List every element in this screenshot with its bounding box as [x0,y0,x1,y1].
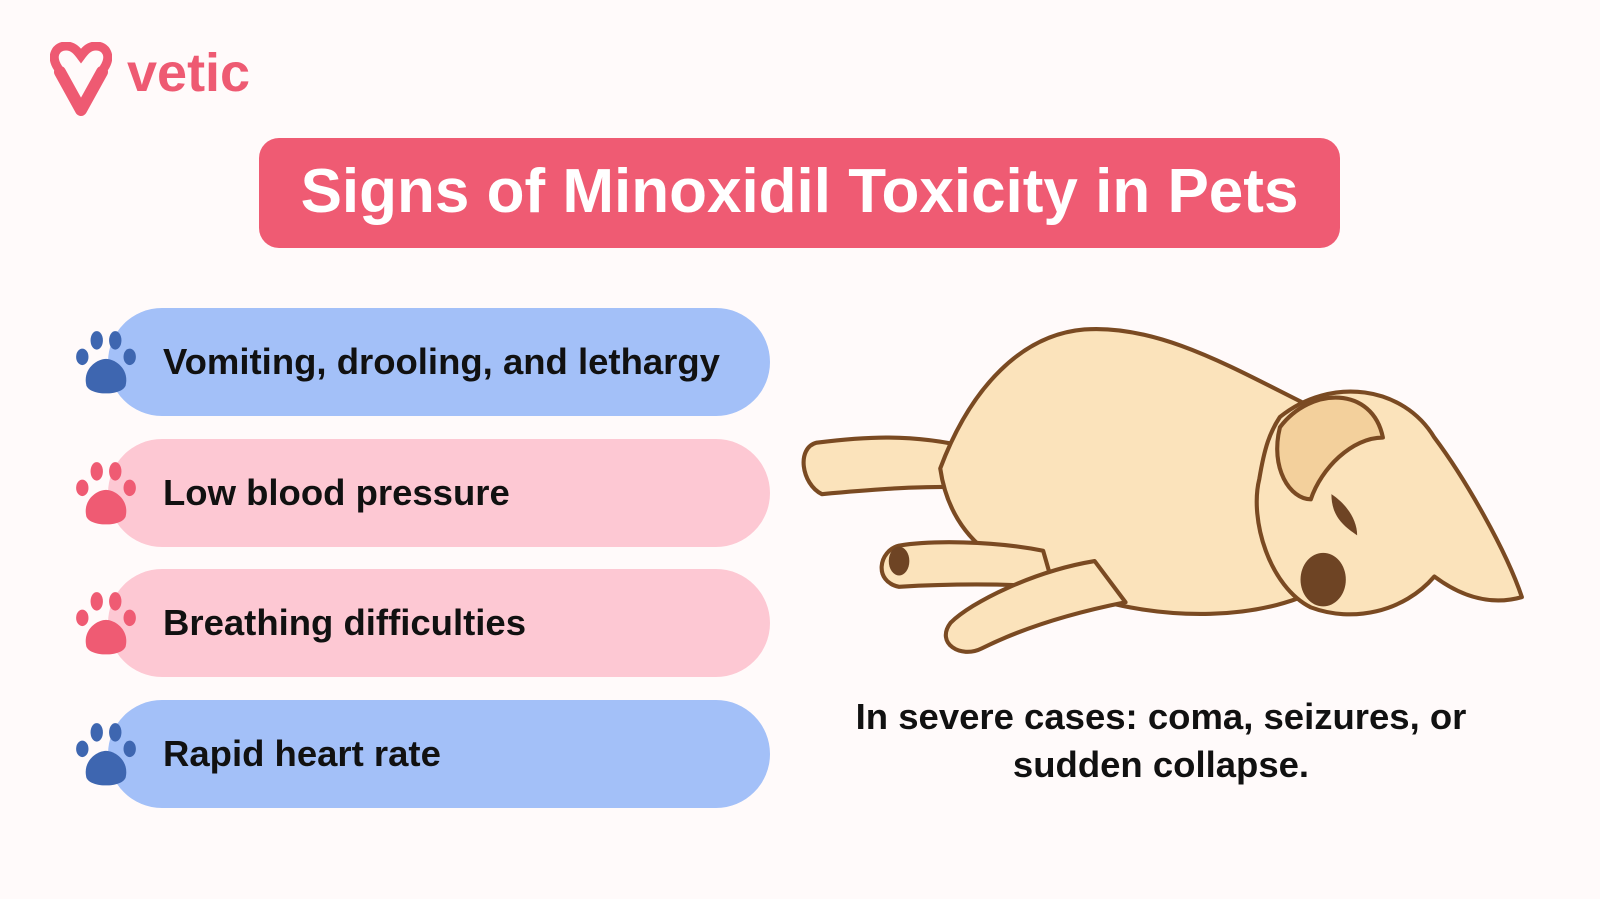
icon: paw pink [76,462,136,524]
sign 3 [108,569,770,677]
sign 2 [108,439,770,547]
logo: vetic [127,43,250,103]
callout: severe cases [856,696,1466,785]
icon: paw blue [76,331,136,394]
icon: paw pink [76,592,136,654]
logo [50,42,250,116]
sign 1 [108,308,770,416]
sign 4 [108,700,770,808]
text: Low blood pressure [163,472,510,513]
text: Breathing difficulties [163,602,526,643]
callout: severe cases: sudden collapse. [1013,744,1309,785]
title: Signs of Minoxidil Toxicity in Pets [301,157,1298,226]
text: Rapid heart rate [163,733,441,774]
icon: paw blue [76,723,136,786]
illustration: sleeping dog [802,327,1524,654]
callout: severe cases: In severe cases: coma, seizures, or [856,696,1466,737]
title [259,138,1340,248]
text: Vomiting, drooling, and lethargy [163,341,720,382]
